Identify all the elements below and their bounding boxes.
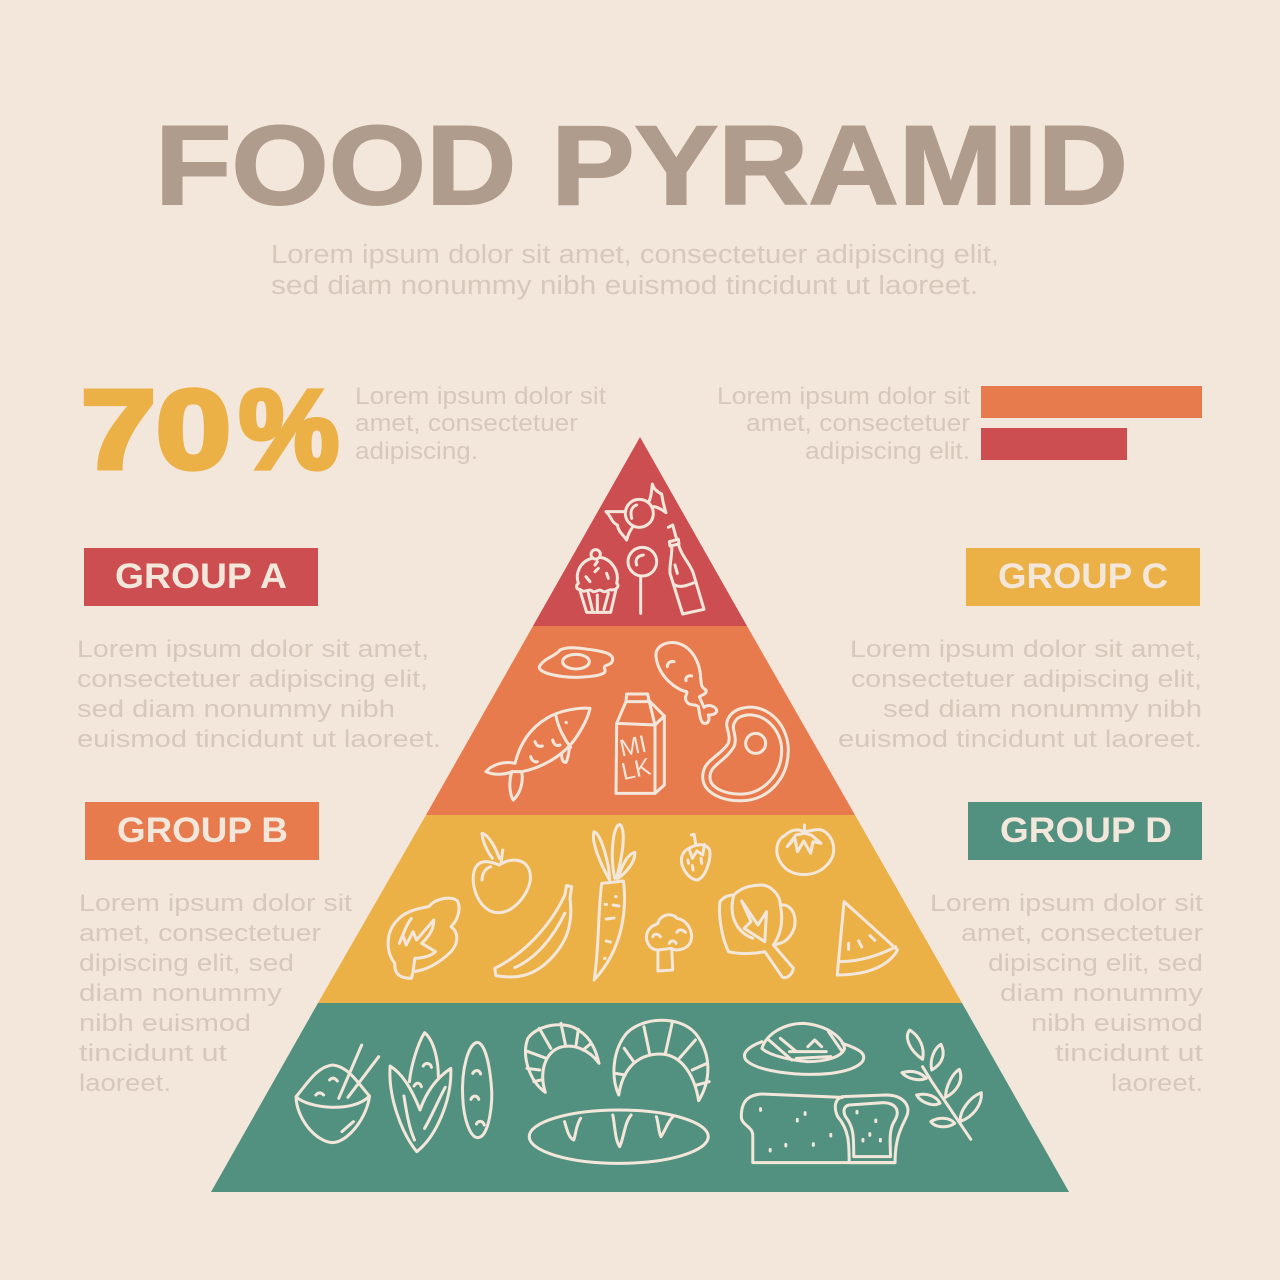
icon: baguette [529,1110,708,1163]
text: group A: euismod tincidunt ut laoreet. [77,726,441,753]
label: group C: GROUP C [998,557,1168,596]
text: group A [77,636,441,753]
statistic description [355,383,606,465]
bar chart [981,386,1202,460]
bars description: amet, consectetuer [746,410,970,437]
icon: milk carton: LK [619,753,653,786]
pyramid tier: grains [211,1003,1069,1192]
pyramid tier: sweets [533,437,747,626]
icon: rice bowl [296,1045,379,1143]
text: group B [79,890,352,1097]
icon: fried egg [539,648,613,677]
icon: milk carton: MI [617,731,649,763]
statistic description: Lorem ipsum dolor sit [355,383,606,410]
title: FOOD PYRAMID [155,103,1128,228]
text: group B: tincidunt ut [79,1040,227,1067]
bars description: Lorem ipsum dolor sit [717,383,970,410]
text: group D: laoreet. [1111,1070,1203,1097]
icon: chicken leg [656,643,717,723]
icon: wheat branch [902,1030,981,1139]
intro text [271,241,999,300]
bars description: adipiscing elit. [805,438,970,465]
label: group A: GROUP A [115,557,287,596]
statistic description: amet, consectetuer [355,410,578,437]
icon: apple [473,833,530,913]
text: group C: sed diam nonummy nibh [883,696,1202,723]
icon: plate of food [744,1023,864,1074]
intro text: Lorem ipsum dolor sit amet, consectetuer adipiscing elit, [271,241,999,269]
icon: corn [390,1033,451,1152]
text: group D: tincidunt ut [1055,1040,1203,1067]
text: group B: laoreet. [79,1070,171,1097]
icon: small croissant [526,1023,599,1092]
label: group D [968,802,1202,860]
icon: lollipop [628,547,657,613]
big statistic 70%: % [239,367,339,492]
icon: steak [703,707,788,801]
label: group C [966,548,1200,606]
icon: leafy greens [720,885,795,978]
text: group B: diam nonummy [79,980,283,1007]
icon: watermelon [837,902,898,975]
text: group C: euismod tincidunt ut laoreet. [838,726,1202,753]
icon: banana [495,886,572,977]
icon: large croissant [614,1020,709,1101]
icon: strawberry [681,834,710,880]
icon: carrot [593,824,635,980]
icon: cupcake [577,550,618,612]
text: group C [838,636,1202,753]
icon: milk carton [616,694,664,793]
icon: fish [486,708,590,800]
text: group A: sed diam nonummy nibh [77,696,395,723]
bars description [717,383,970,465]
text: group D: nibh euismod [1031,1010,1203,1037]
big statistic 70%: 70 [81,367,231,492]
icon: candy [606,484,666,540]
label: group D: GROUP D [1000,811,1172,850]
text: group B: amet, consectetuer [79,920,321,947]
text: group D: dipiscing elit, sed [988,950,1203,977]
label: group B: GROUP B [117,811,288,850]
pyramid tier: fruit and vegetables [318,815,962,1003]
icon: lettuce [388,898,459,978]
label: group A [84,548,318,606]
statistic description: adipiscing. [355,438,478,465]
text: group D: Lorem ipsum dolor sit [930,890,1203,917]
text: group D: amet, consectetuer [961,920,1203,947]
pyramid [211,437,1069,1192]
icons: sweets and proteins [486,484,788,801]
icons: fruit and vegetables [388,824,898,980]
text: group B: dipiscing elit, sed [79,950,294,977]
text: group A: consectetuer adipiscing elit, [77,666,428,693]
icon: cucumber [463,1042,492,1138]
icon: tomato [777,825,834,875]
text: group B: nibh euismod [79,1010,251,1037]
text: group C: Lorem ipsum dolor sit amet, [850,636,1202,663]
text: group D [930,890,1204,1097]
icon: broccoli [646,915,692,971]
pyramid tier: protein [426,626,855,815]
label: group B [85,802,319,860]
icon: sliced bread [741,1094,908,1163]
text: group A: Lorem ipsum dolor sit amet, [77,636,429,663]
icons: grains [296,1020,981,1163]
text: group D: diam nonummy [1000,980,1204,1007]
intro text: sed diam nonummy nibh euismod tincidunt ut laoreet. [271,272,978,300]
icon: bottle [668,525,704,614]
text: group B: Lorem ipsum dolor sit [79,890,352,917]
text: group C: consectetuer adipiscing elit, [851,666,1202,693]
